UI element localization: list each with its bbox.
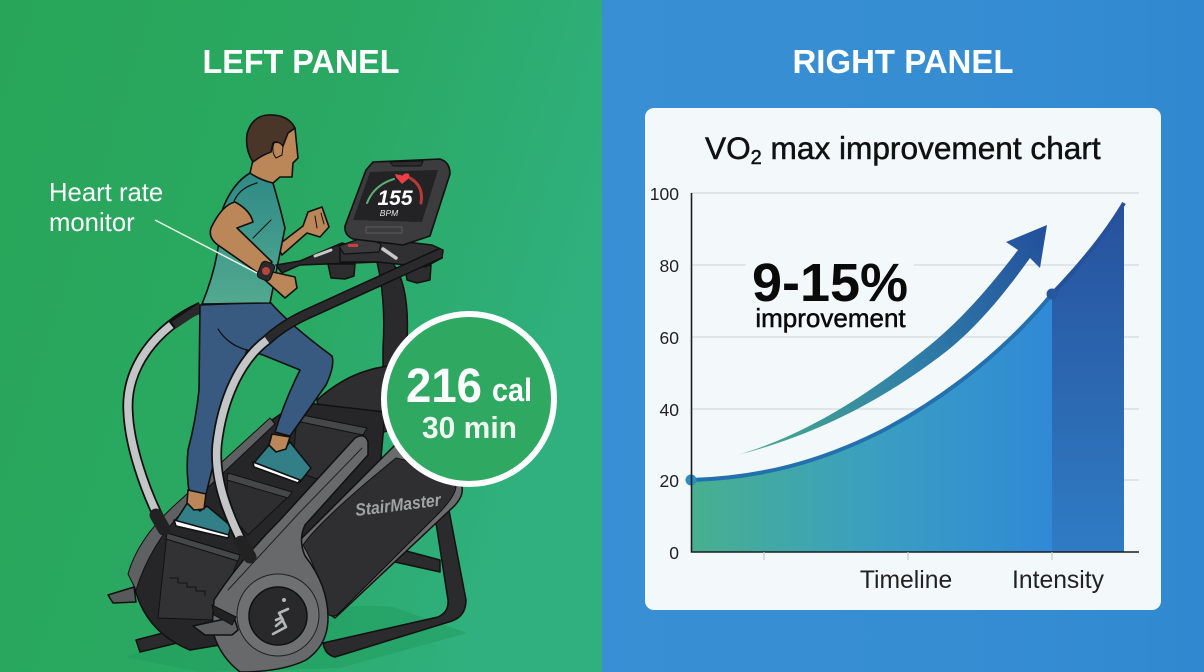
ear: [273, 142, 283, 158]
callout: calories badge: cal: [492, 372, 532, 408]
upper shoe: [253, 442, 311, 482]
shirt: [202, 173, 285, 304]
improvement figure: 9-15%: [752, 253, 908, 313]
far arm: [277, 207, 329, 255]
illustration: runner: [174, 115, 333, 538]
y axis labels: 100: [650, 184, 679, 204]
chart axes: [692, 193, 1139, 552]
pedal right: [193, 617, 238, 635]
lower shoe: [175, 502, 231, 537]
console housing: [345, 159, 450, 245]
main grey arm: [212, 436, 368, 672]
y axis labels: [650, 184, 679, 563]
console top notch: [390, 161, 423, 166]
y axis labels: 20: [660, 471, 679, 491]
callout: calories badge: 30 min: [422, 410, 517, 445]
callout: calories badge: 216: [406, 360, 482, 413]
panel: right blue background: [602, 0, 1204, 672]
icon: wrist heart rate monitor: [256, 260, 276, 282]
callout: heart rate monitor label: monitor: [49, 209, 135, 237]
x axis labels: Timeline: [860, 567, 952, 594]
floor shadow: [126, 606, 467, 672]
front rail and silver hoop: [217, 253, 441, 557]
StairMaster brand: StairMaster: [354, 490, 443, 520]
handle: [276, 243, 380, 273]
gauge arcs: [367, 179, 394, 203]
pants: [187, 302, 333, 494]
panel: left green background: [0, 0, 602, 672]
steps: [158, 414, 367, 620]
chart title: 2: [751, 147, 762, 169]
callout: heart rate monitor label: Heart rate: [49, 179, 163, 207]
console column: [377, 262, 407, 375]
heart rate reading: 155: [377, 187, 413, 210]
neck and face: [250, 128, 298, 183]
near arm: [210, 202, 272, 273]
callout: heart rate monitor label: [49, 179, 257, 273]
pedal left: [108, 587, 136, 603]
cup holders: [328, 264, 355, 279]
rear body hump: [317, 366, 420, 440]
illustration: stair climber machine: [108, 262, 467, 672]
curve markers: [686, 474, 696, 486]
panel: chart card: Intensity: [1012, 567, 1105, 594]
callout: calories badge: [384, 314, 554, 484]
console tray: [340, 238, 443, 267]
console screen: [353, 170, 438, 222]
heading: right panel: RIGHT PANEL: [792, 43, 1014, 80]
intensity zone: [1052, 203, 1124, 552]
wheel cover: [237, 574, 319, 656]
runner glyph: [273, 598, 288, 634]
area under curve: [691, 294, 1052, 552]
BPM label: BPM: [380, 208, 399, 218]
y axis labels: 0: [669, 543, 679, 563]
heading: left panel: LEFT PANEL: [202, 43, 400, 80]
heart icon: [395, 173, 409, 184]
curve line: [691, 203, 1124, 480]
y axis labels: 40: [660, 400, 679, 420]
near hand: [265, 272, 297, 298]
chart gridlines: [691, 193, 1139, 480]
console buttons: [366, 227, 402, 233]
illustration: rear handrail: [128, 307, 201, 529]
improvement label: improvement: [755, 303, 906, 333]
chart title: max improvement chart: [762, 130, 1101, 166]
illustration: front handrail and console: [217, 159, 450, 557]
stair body: [132, 402, 385, 650]
side housing: [300, 440, 462, 618]
chart title: VO: [705, 130, 751, 166]
y axis labels: 60: [660, 328, 679, 348]
y axis labels: 80: [660, 256, 679, 276]
improvement arrow: [737, 225, 1047, 455]
panel: chart card: [645, 108, 1161, 610]
rear support frame: [323, 505, 466, 657]
hair: [247, 115, 295, 162]
x axis ticks: [764, 552, 1052, 560]
